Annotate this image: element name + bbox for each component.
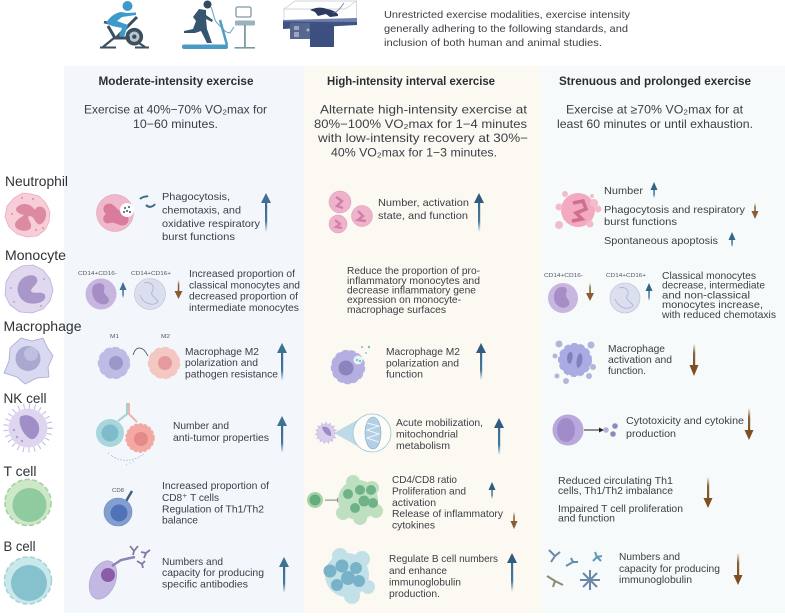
text: M2 polarization [185, 346, 278, 380]
arrow: up [279, 557, 289, 593]
icon: immunoglobulins [547, 550, 602, 590]
panel: moderate-intensity exercise background [64, 66, 304, 613]
text: T cell effects [162, 480, 269, 526]
icon: macrophage [4, 338, 53, 384]
icon: NK cell with mitochondrion [316, 414, 391, 452]
text: monocyte proportions: Increased proportion of [189, 268, 295, 280]
text: M2 polarization: Macrophage M2 [185, 346, 259, 358]
text: monocyte changes [661, 270, 776, 321]
icon: NK cell killing tumour cell [96, 403, 154, 465]
arrow: up [261, 193, 271, 232]
icon: T cell proliferation [307, 475, 383, 525]
text: T cell effects: Increased proportion of [162, 480, 269, 492]
text: T cell ratio and cytokines: activation [392, 497, 436, 509]
text: mobilization: Acute mobilization, [396, 417, 483, 429]
text block: high-intensity interval definition [314, 102, 528, 160]
row: strenuous NK cell [552, 408, 754, 446]
text: macrophage activation: activation and [608, 354, 672, 366]
icon: activated macrophage [552, 340, 596, 384]
icon: macrophage with vacuole [332, 346, 370, 384]
text: immunoglobulin production [619, 551, 720, 586]
heading: high-intensity interval exercise: High-intensity interval exercise [327, 76, 495, 88]
text: HIIT monocyte: expression on monocyte- [347, 294, 461, 306]
icon: CD8 T cell [104, 491, 132, 526]
icon: NK cell [6, 406, 50, 450]
text: mobilization [396, 417, 483, 452]
text: M2 polarization: polarization and [185, 357, 258, 369]
row: moderate macrophage [98, 334, 287, 381]
icon: NK cell secreting cytokines [552, 414, 618, 446]
label: B cell: B cell [4, 538, 36, 554]
text: monocyte proportions: decreased proportion of [189, 290, 298, 302]
text: NK properties [173, 420, 269, 444]
arrow: down [752, 203, 758, 219]
text: antibody production: specific antibodies [162, 578, 248, 590]
arrow: down [174, 280, 182, 299]
row: HIIT NK cell [316, 414, 504, 455]
arrow: up [728, 232, 736, 247]
arrow: polarization [133, 348, 148, 356]
text block: inclusion criteria [384, 9, 631, 49]
heading: moderate-intensity exercise: Moderate-intensity exercise [98, 76, 253, 88]
label: CD8: CD8 [112, 488, 124, 494]
text block: inclusion criteria: generally adhering to the following standards, and [384, 23, 628, 35]
text block: moderate-intensity definition: Exercise at 40%−70% VO₂max for [84, 102, 267, 116]
row: moderate T cell [104, 480, 269, 526]
arrow: up [646, 283, 652, 301]
text: phagocytosis [604, 204, 746, 228]
arrow: up [120, 282, 126, 298]
row: strenuous monocyte [544, 270, 776, 321]
text: macrophage activation: Macrophage [608, 343, 665, 355]
text: T cell impairment: and function [558, 512, 615, 524]
icon: B cell [4, 557, 52, 604]
text: monocyte changes: decrease, intermediate [662, 280, 765, 292]
text: macrophage activation [608, 343, 672, 377]
arrow: down [734, 553, 742, 585]
arrow: up [277, 343, 287, 381]
text: neutrophil functions: burst functions [162, 231, 235, 243]
row: moderate monocyte [78, 268, 300, 314]
label: CD14+CD16+: CD14+CD16+ [606, 273, 646, 279]
text: antibody production [162, 556, 264, 590]
icon: classical monocyte [86, 278, 116, 310]
text: M2 function: polarization and [386, 358, 459, 370]
text: neutrophil number: Number, activation [378, 197, 469, 209]
row: moderate NK cell [96, 403, 287, 465]
row: HIIT T cell [307, 474, 518, 532]
text: neutrophil functions: oxidative respiratory [162, 218, 261, 230]
text: M2 function: Macrophage M2 [386, 346, 460, 358]
icon: intermediate monocyte [610, 283, 640, 313]
text: HIIT monocyte: inflammatory monocytes and [347, 275, 480, 287]
icon: classical monocyte [548, 283, 578, 313]
label: M1: M1 [110, 334, 119, 340]
panel: strenuous and prolonged exercise background [541, 66, 785, 613]
text: immunoglobulin production: capacity for producing [619, 563, 720, 575]
label: neutrophil: Neutrophil [5, 173, 68, 189]
arrow: up [494, 418, 504, 455]
text: macrophage activation: function. [608, 365, 646, 377]
icon: plasma cell releasing antibodies [84, 546, 150, 603]
row: HIIT neutrophil [329, 191, 484, 233]
arrow: up [650, 182, 658, 198]
text: B cell regulation: immunoglobulin [389, 576, 461, 588]
label: T cell: T cell [4, 463, 36, 479]
text block: moderate-intensity definition: 10−60 minutes. [133, 117, 218, 131]
icon: B cell cluster [324, 548, 375, 604]
icon: cyclist on exercise bike [100, 1, 149, 48]
icon: neutrophil [5, 193, 50, 237]
label: CD14+CD16+: CD14+CD16+ [131, 271, 171, 277]
text: HIIT monocyte: macrophage surfaces [347, 304, 446, 316]
text block: strenuous and prolonged definition: least 60 minutes or until exhaustion. [557, 117, 753, 131]
arrow: up [476, 343, 486, 380]
text: immunoglobulin production: immunoglobulin [619, 574, 692, 586]
icon: M1 macrophage [98, 348, 130, 378]
row: strenuous B cell [547, 550, 742, 590]
text: mobilization: metabolism [396, 440, 450, 452]
icon: monocyte [5, 265, 53, 313]
arrow: up [277, 416, 287, 453]
text: neutrophil functions: chemotaxis, and [162, 204, 241, 216]
text: monocyte changes: Classical monocytes [662, 270, 756, 282]
text: T cell effects: CD8⁺ T cells [162, 492, 219, 504]
arrow: up [474, 193, 484, 232]
text: monocyte proportions: classical monocytes and [189, 280, 300, 292]
icon: neutrophil group [329, 191, 372, 233]
text: T cell ratio and cytokines: cytokines [392, 520, 435, 532]
text: cytotoxicity: Cytotoxicity and cytokine [626, 415, 744, 427]
text: NK properties: anti-tumor properties [173, 432, 269, 444]
text block: high-intensity interval definition: 40% VO₂max for 1−3 minutes. [331, 146, 497, 160]
row: strenuous neutrophil [555, 182, 758, 247]
text: neutrophil functions [162, 191, 261, 243]
row: moderate neutrophil [96, 191, 271, 243]
icon: mouse in metabolic chamber [283, 1, 357, 47]
text: M2 function [386, 346, 460, 380]
icon: neutrophil phagocytosing bacteria [96, 194, 155, 232]
text: monocyte changes: with reduced chemotaxis [661, 309, 776, 321]
panel: high-intensity interval exercise background [304, 66, 541, 613]
text: T cell effects: balance [162, 514, 198, 526]
text: T cell impairment: Reduced circulating Th1 [558, 475, 673, 487]
text: M2 function: function [386, 368, 423, 380]
icon: runner on treadmill with gas analyser [182, 0, 255, 49]
text block: high-intensity interval definition: Alternate high-intensity exercise at [320, 102, 528, 116]
text: mobilization: mitochondrial [396, 428, 458, 440]
text: B cell regulation [389, 553, 498, 600]
text: T cell effects: Regulation of Th1/Th2 [162, 504, 264, 516]
text: T cell ratio and cytokines: Proliferation and [392, 486, 466, 498]
text: phagocytosis: Phagocytosis and respiratory [604, 204, 746, 216]
text: neutrophil number [378, 197, 469, 222]
arrow: up [488, 482, 496, 499]
text: antibody production: Numbers and [162, 556, 223, 568]
text: HIIT monocyte: Reduce the proportion of pro- [347, 265, 480, 277]
text block: inclusion criteria: Unrestricted exercise modalities, exercise intensity [384, 9, 631, 21]
arrow: up [507, 553, 517, 592]
icon: degranulating neutrophil [555, 191, 602, 229]
arrow: down [586, 283, 594, 301]
text: B cell regulation: production. [389, 588, 440, 600]
text: T cell impairment: Impaired T cell proliferation [558, 503, 683, 515]
text: B cell regulation: Regulate B cell numbers [389, 553, 498, 565]
text: number: Number [604, 185, 644, 197]
text: M2 polarization: pathogen resistance [185, 368, 278, 380]
text: cytotoxicity: production [626, 428, 676, 440]
text: neutrophil number: state, and function [378, 210, 468, 222]
text: T cell ratio and cytokines: CD4/CD8 ratio [392, 474, 457, 486]
heading: strenuous and prolonged exercise: Strenuous and prolonged exercise [559, 76, 751, 88]
text: cytotoxicity [626, 415, 744, 440]
text: B cell regulation: and enhance [389, 565, 447, 577]
text: monocyte changes: monocytes increase, [662, 299, 763, 311]
text block: high-intensity interval definition: with low-intensity recovery at 30%− [317, 131, 528, 145]
icon: intermediate monocyte [134, 278, 166, 310]
text: antibody production: capacity for producing [162, 567, 264, 579]
text: T cell impairment [558, 475, 683, 524]
arrow: down [744, 408, 754, 440]
label: M2: M2 [161, 334, 170, 340]
text block: inclusion criteria: inclusion of both human and animal studies. [384, 37, 602, 49]
text block: high-intensity interval definition: 80%−100% VO₂max for 1−4 minutes [314, 117, 527, 131]
arrow: down [510, 512, 518, 529]
text: HIIT monocyte [347, 265, 480, 316]
row: HIIT B cell [324, 548, 517, 604]
arrow: down [690, 344, 698, 376]
icon: M2 macrophage [148, 348, 180, 378]
row: moderate B cell [84, 546, 289, 603]
row: HIIT macrophage [332, 343, 486, 384]
text: monocyte proportions: intermediate monocytes [189, 302, 299, 314]
label: NK cell: NK cell [4, 390, 46, 406]
row: strenuous T cell [558, 475, 712, 524]
text: monocyte proportions [189, 268, 300, 314]
text: phagocytosis: burst functions [604, 216, 677, 228]
text: NK properties: Number and [173, 420, 229, 432]
label: CD14+CD16-: CD14+CD16- [544, 273, 583, 279]
text block: strenuous and prolonged definition: Exercise at ≥70% VO₂max for at [566, 102, 744, 116]
text: T cell ratio and cytokines: Release of inflammatory [392, 508, 504, 520]
text: neutrophil functions: Phagocytosis, [162, 191, 230, 203]
arrow: down [704, 477, 712, 508]
row: strenuous macrophage [552, 340, 698, 384]
text: T cell ratio and cytokines [392, 474, 504, 532]
icon: T cell [5, 480, 51, 526]
label: monocyte: Monocyte [5, 247, 66, 263]
text: T cell impairment: cells, Th1/Th2 imbalance [558, 485, 673, 497]
text: monocyte changes: and non-classical [662, 290, 750, 302]
text block: moderate-intensity definition [84, 102, 267, 131]
text: apoptosis: Spontaneous apoptosis [604, 235, 718, 247]
text: HIIT monocyte: decrease inflammatory gene [347, 284, 476, 296]
label: CD14+CD16-: CD14+CD16- [78, 271, 117, 277]
label: macrophage: Macrophage [4, 318, 82, 334]
text: immunoglobulin production: Numbers and [619, 551, 680, 563]
text block: strenuous and prolonged definition [557, 102, 753, 131]
